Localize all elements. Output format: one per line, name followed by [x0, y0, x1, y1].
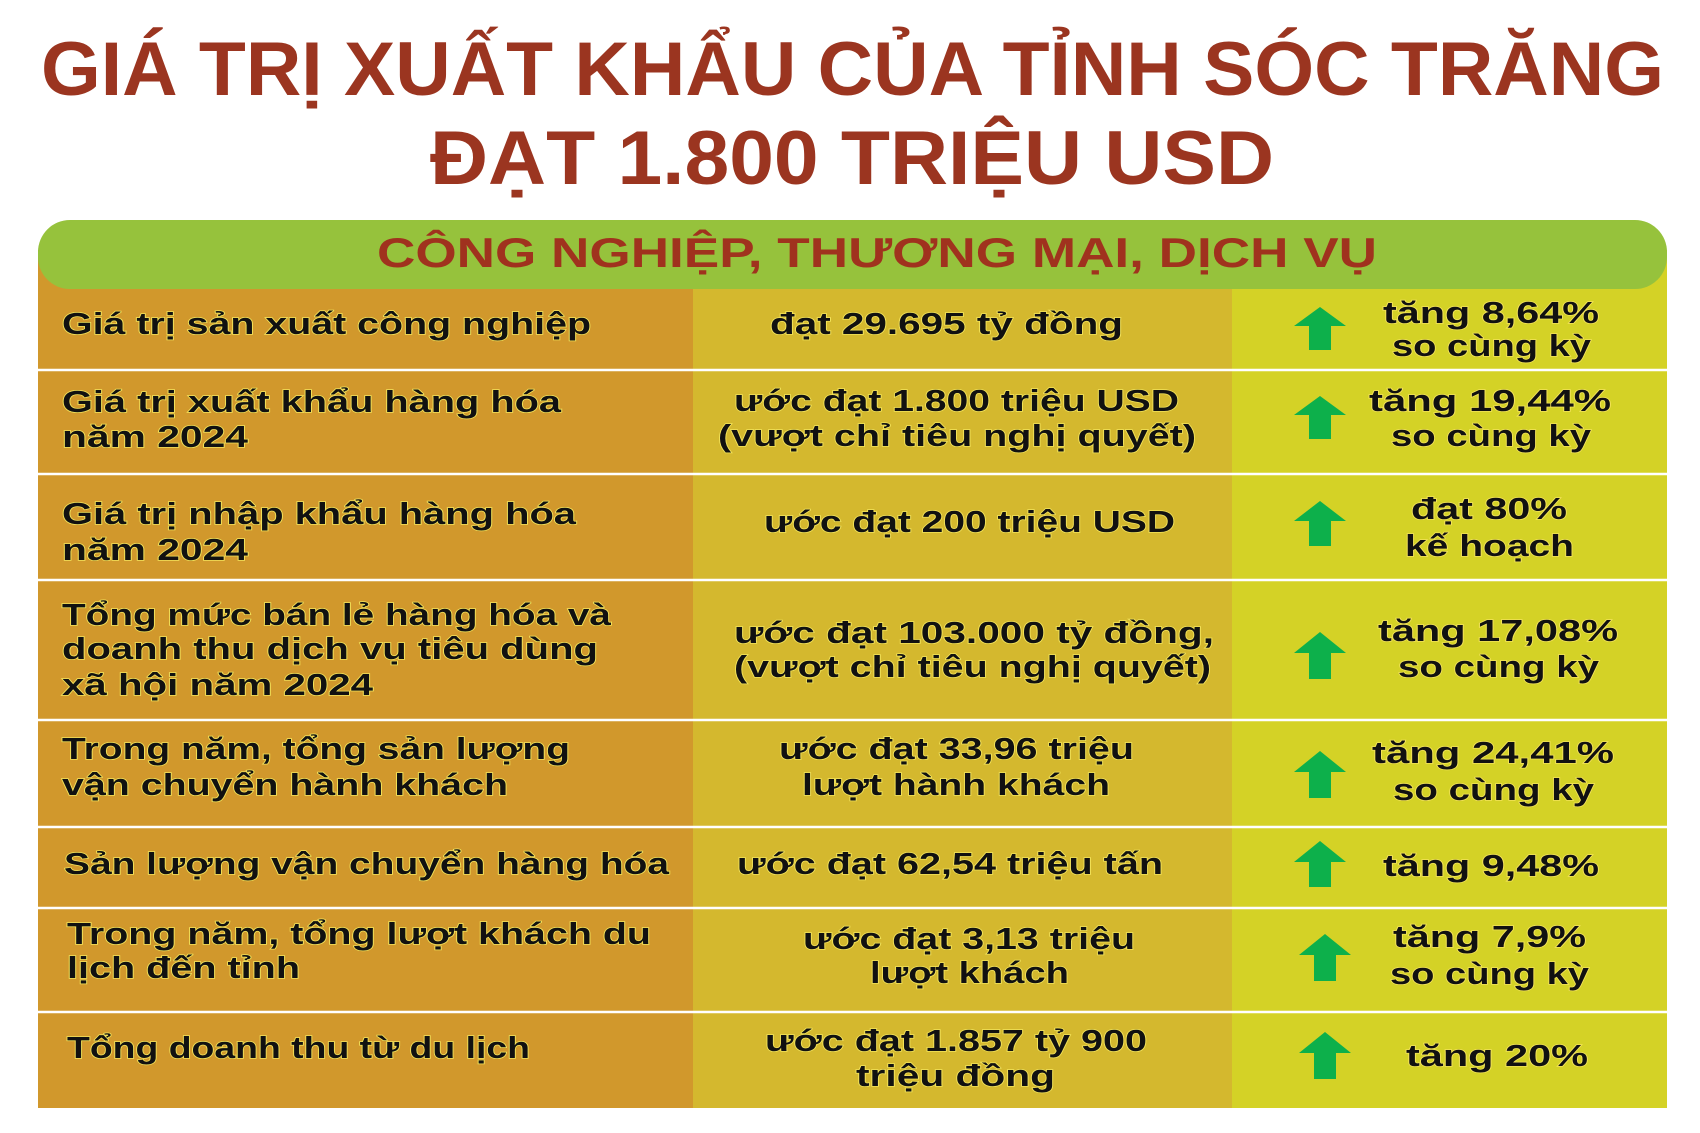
- row texts: Trong năm, tổng lượt khách du: [67, 916, 651, 951]
- row texts: so cùng kỳ: [1392, 328, 1592, 363]
- row texts: [62, 295, 1618, 1093]
- row texts: Giá trị nhập khẩu hàng hóa: [62, 496, 577, 531]
- row texts: ước đạt 33,96 triệu: [779, 731, 1134, 766]
- row texts: triệu đồng: [856, 1058, 1055, 1093]
- row texts: so cùng kỳ: [1390, 956, 1590, 991]
- row texts: Trong năm, tổng sản lượng: [62, 731, 570, 766]
- row texts: đạt 80%: [1411, 491, 1567, 526]
- row texts: năm 2024: [62, 419, 249, 454]
- row texts: tăng 19,44%: [1369, 383, 1611, 418]
- row texts: so cùng kỳ: [1398, 649, 1600, 684]
- row texts: so cùng kỳ: [1391, 418, 1592, 453]
- row texts: Giá trị xuất khẩu hàng hóa: [62, 384, 562, 419]
- row texts: kế hoạch: [1405, 528, 1574, 563]
- row texts: Tổng mức bán lẻ hàng hóa và: [62, 597, 612, 632]
- row texts: ước đạt 1.800 triệu USD: [734, 383, 1179, 418]
- row texts: lượt khách: [870, 955, 1069, 990]
- row texts: tăng 7,9%: [1393, 919, 1586, 954]
- table: [38, 250, 1667, 1108]
- title: ĐẠT 1.800 TRIỆU USD: [430, 115, 1274, 201]
- title: [41, 26, 1664, 201]
- row texts: lượt hành khách: [802, 767, 1110, 802]
- row texts: ước đạt 103.000 tỷ đồng,: [734, 615, 1214, 650]
- row texts: tăng 20%: [1406, 1038, 1588, 1073]
- row texts: xã hội năm 2024: [62, 667, 374, 702]
- row texts: (vượt chỉ tiêu nghị quyết): [734, 649, 1211, 684]
- row texts: ước đạt 1.857 tỷ 900: [765, 1023, 1147, 1058]
- row texts: Giá trị sản xuất công nghiệp: [62, 306, 591, 341]
- row texts: đạt 29.695 tỷ đồng: [770, 306, 1123, 341]
- row texts: (vượt chỉ tiêu nghị quyết): [718, 418, 1196, 453]
- row texts: tăng 24,41%: [1372, 735, 1614, 770]
- title: GIÁ TRỊ XUẤT KHẨU CỦA TỈNH SÓC TRĂNG: [41, 26, 1664, 112]
- row texts: tăng 9,48%: [1383, 848, 1599, 883]
- row texts: Sản lượng vận chuyển hàng hóa: [64, 846, 670, 881]
- row texts: tăng 17,08%: [1378, 613, 1618, 648]
- row texts: năm 2024: [62, 532, 249, 567]
- header banner: [38, 220, 1667, 289]
- row texts: Tổng doanh thu từ du lịch: [67, 1030, 530, 1065]
- row texts: ước đạt 200 triệu USD: [764, 504, 1175, 539]
- row texts: so cùng kỳ: [1393, 772, 1595, 807]
- icons: green up arrows: [1294, 307, 1351, 1079]
- row texts: doanh thu dịch vụ tiêu dùng: [62, 631, 598, 666]
- row texts: ước đạt 3,13 triệu: [803, 921, 1135, 956]
- row texts: vận chuyển hành khách: [62, 767, 508, 802]
- row texts: tăng 8,64%: [1383, 295, 1599, 330]
- row texts: lịch đến tỉnh: [67, 950, 300, 985]
- row texts: ước đạt 62,54 triệu tấn: [737, 846, 1163, 881]
- header banner: CÔNG NGHIỆP, THƯƠNG MẠI, DỊCH VỤ: [377, 228, 1377, 276]
